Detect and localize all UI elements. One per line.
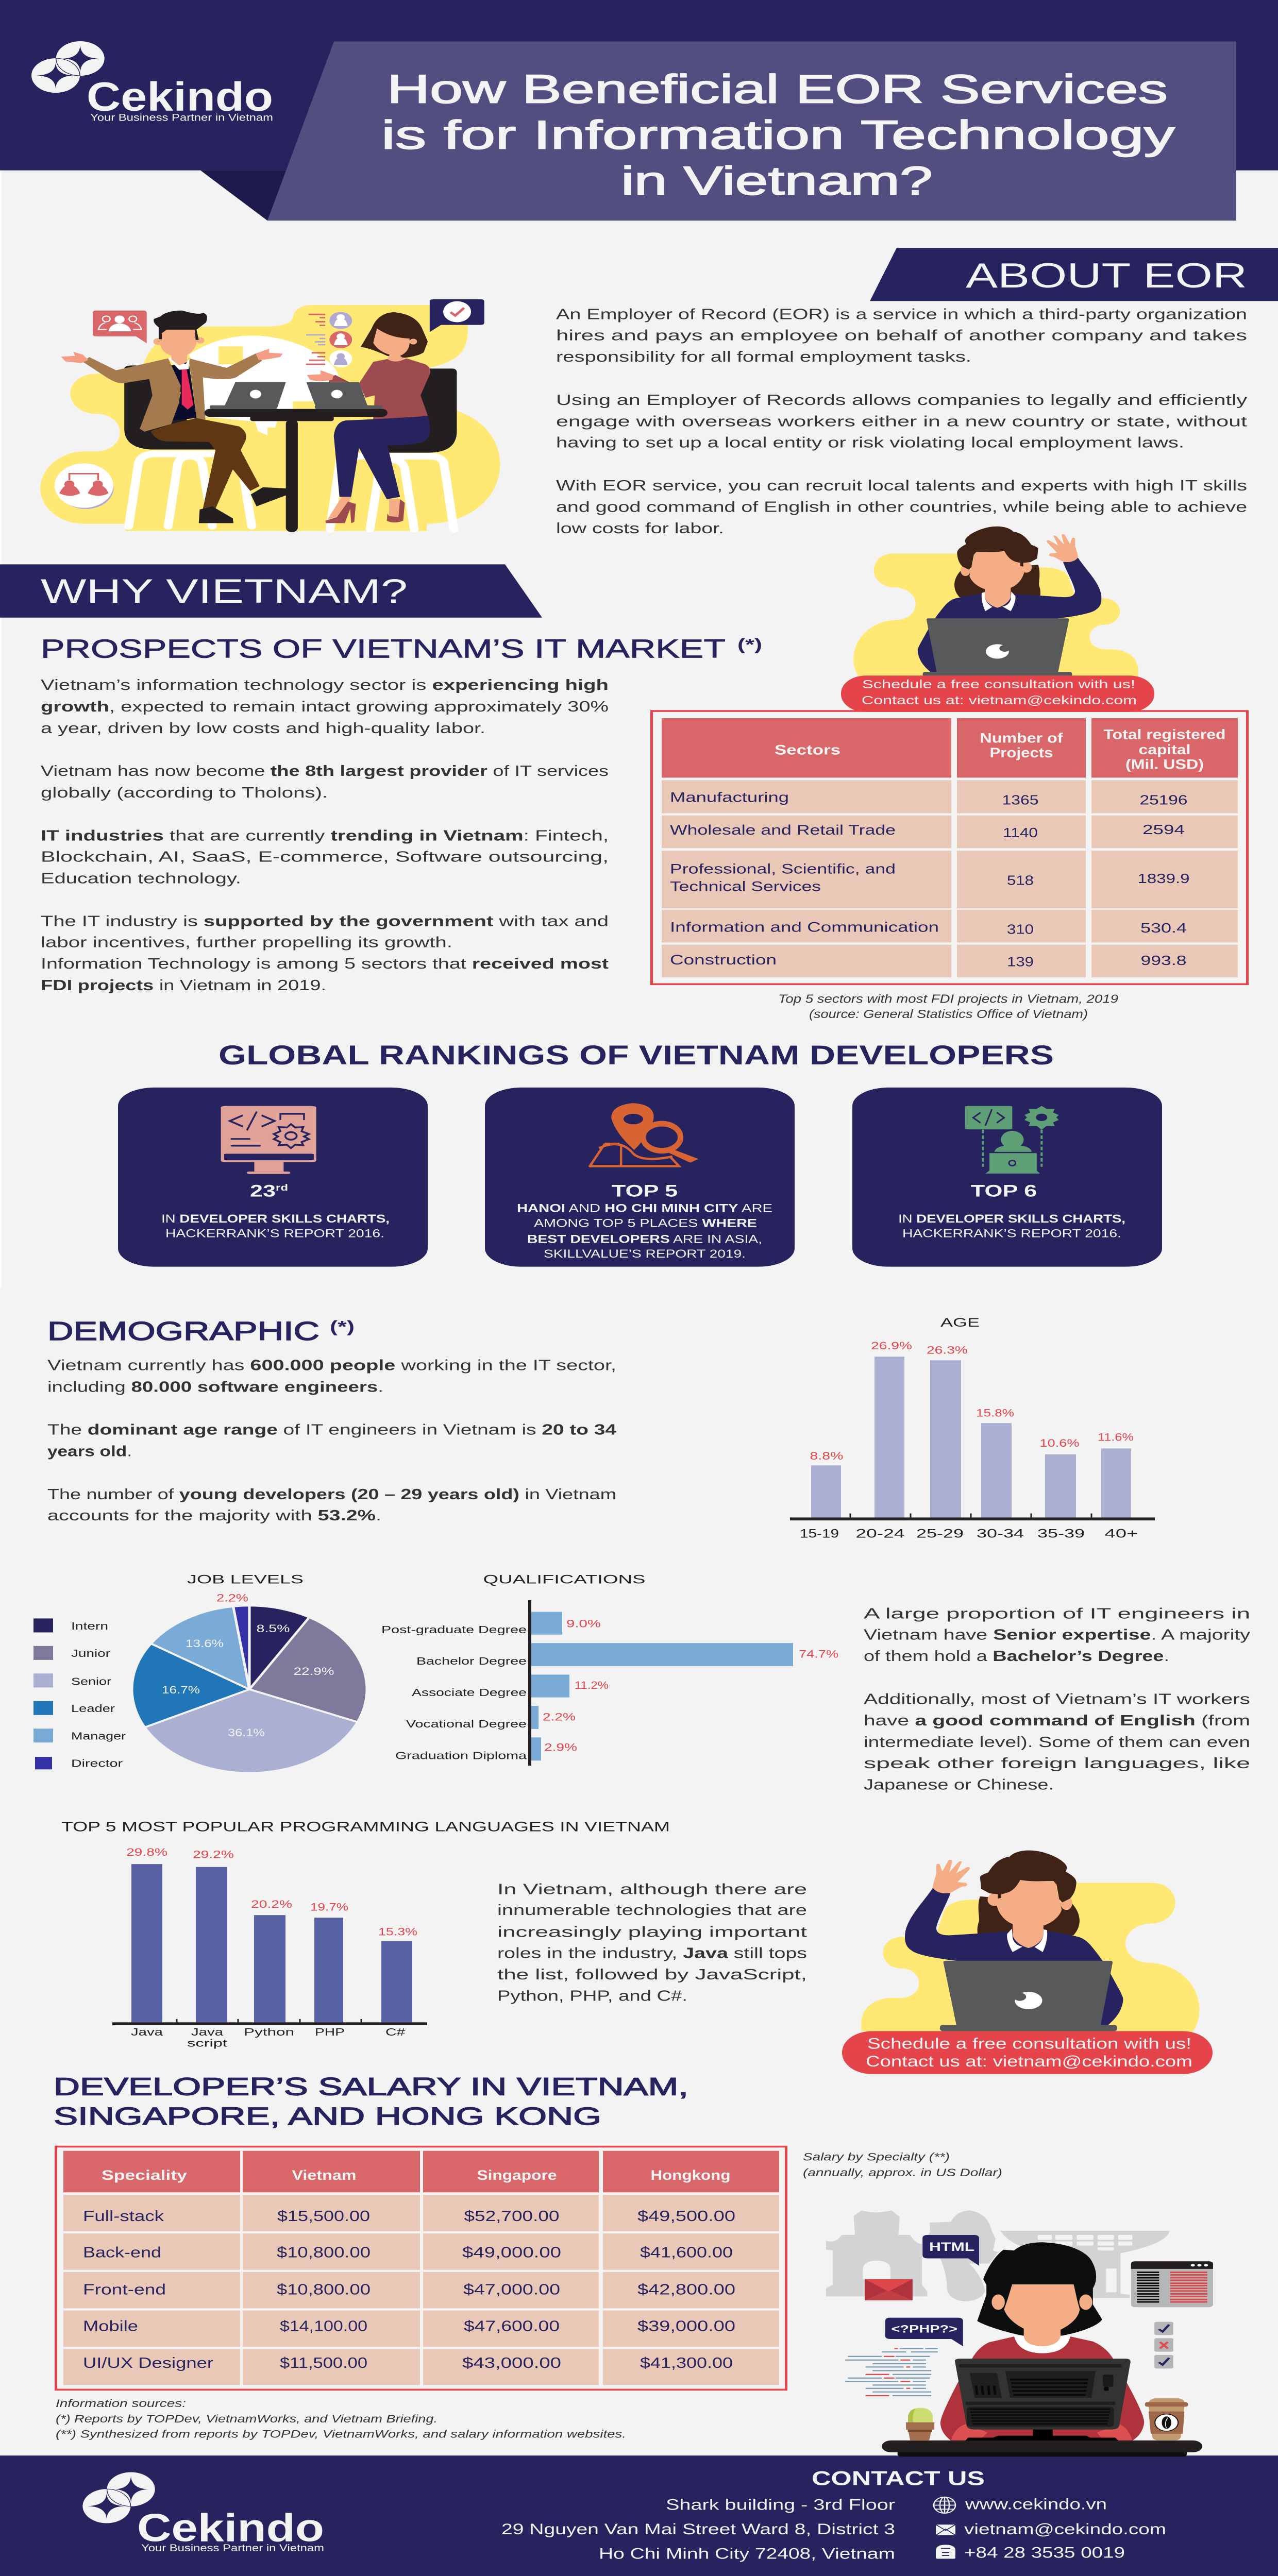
panel: ranking top 5: BEST DEVELOPERS ARE IN ASIA, (527, 1233, 762, 1245)
legend: job levels: Senior (71, 1676, 111, 1687)
table: top 5 FDI sectors: 993.8 (1141, 953, 1186, 968)
text block: about EOR: Using an Employer of Records allows companies to legally and efficiently (556, 392, 1248, 409)
table: salary by specialty: Mobile (83, 2318, 138, 2334)
text block: programming languages: increasingly playing important (497, 1924, 807, 1940)
text block: prospects: Vietnam has now become the 8th largest provider of IT services (41, 763, 609, 779)
text block: web, email, phone: vietnam@cekindo.com (964, 2520, 1166, 2537)
text block: web, email, phone: +84 28 3535 0019 (964, 2544, 1125, 2561)
text block: about EOR: having to set up a local entity or risk violating local employment laws. (556, 435, 1184, 451)
chart: age bar chart: 15-19 (800, 1527, 839, 1540)
chart: age bar chart: 26.9% (871, 1339, 912, 1352)
panel: ranking 23rd: HACKERRANK’S REPORT 2016. (165, 1227, 384, 1240)
panel: title background (267, 42, 1236, 221)
chart: qualifications bars: 2.9% (544, 1741, 577, 1754)
text block: address: 29 Nguyen Van Mai Street Ward 8, District 3 (501, 2520, 895, 2537)
button: consultation callout (top): Contact us at: vietnam@cekindo.com (862, 693, 1137, 707)
text block: expertise and English: have a good command of English (from (864, 1713, 1250, 1728)
icon: developer with code and gear (965, 1106, 1058, 1174)
text block: expertise and English: Vietnam have Senior expertise. A majority (864, 1627, 1251, 1643)
caption: table source: (source: General Statistics Office of Vietnam) (809, 1008, 1088, 1021)
chart: qualifications bars: Post-graduate Degree (381, 1624, 527, 1636)
icon: code monitor (221, 1106, 316, 1174)
title (381, 67, 1175, 204)
text block: about EOR (556, 307, 1248, 536)
text block: programming languages: roles in the industry, Java still tops (497, 1945, 807, 1961)
chart: programming languages bars: 29.2% (193, 1848, 234, 1861)
button: consultation callout (bottom): Contact us at: vietnam@cekindo.com (866, 2053, 1192, 2070)
icon: map pin and magnifier (589, 1103, 698, 1167)
text block: address: Ho Chi Minh City 72408, Vietnam (599, 2545, 895, 2562)
chart: qualifications bars: Graduation Diploma (395, 1750, 527, 1761)
legend: job levels: Intern (71, 1621, 108, 1632)
chart: programming languages bars: TOP 5 MOST POPULAR PROGRAMMING LANGUAGES IN VIETNAM (61, 1819, 670, 1834)
icon: mail (936, 2524, 955, 2535)
chart: qualifications bars: Associate Degree (412, 1687, 527, 1699)
chart: age bar chart: 35-39 (1037, 1527, 1085, 1540)
text block: about EOR: low costs for labor. (556, 520, 724, 536)
text block: expertise and English: Japanese or Chinese. (864, 1777, 1054, 1793)
heading: global rankings: GLOBAL RANKINGS OF VIETNAM DEVELOPERS (218, 1040, 1054, 1070)
caption: salary by specialty (803, 2150, 1002, 2179)
table: salary by specialty: $41,600.00 (640, 2245, 733, 2261)
chart: programming languages bars: 15.3% (378, 1925, 417, 1938)
table: salary by specialty: Front-end (83, 2282, 166, 2298)
caption: salary by specialty: (annually, approx. in US Dollar) (803, 2166, 1002, 2179)
text block: demographic (47, 1358, 617, 1524)
button: consultation callout (bottom) (842, 2031, 1213, 2074)
caption: table source (778, 992, 1118, 1021)
chart: job levels pie: 22.9% (293, 1665, 334, 1677)
panel: ranking top 6: HACKERRANK’S REPORT 2016. (902, 1227, 1121, 1240)
chart: programming languages bars: Java (191, 2027, 224, 2038)
text block: information sources: (**) Synthesized from reports by TOPDev, VietnamWorks, and salary information websites. (56, 2428, 626, 2440)
table: salary by specialty: Speciality (102, 2167, 188, 2183)
table: top 5 FDI sectors: Sectors (775, 742, 840, 757)
table: salary by specialty: Vietnam (292, 2167, 356, 2183)
header band (0, 0, 1278, 221)
panel: ranking 23rd (118, 1088, 428, 1267)
logo: Cekindo: Cekindo (87, 74, 273, 120)
text block: demographic: The dominant age range of IT engineers in Vietnam is 20 to 34 (47, 1422, 617, 1438)
illustration: developer at computer: HTML (929, 2240, 974, 2253)
table: salary by specialty: Back-end (83, 2245, 161, 2261)
text block: prospects: Blockchain, AI, SaaS, E-commerce, Software outsourcing, (41, 849, 609, 865)
panel: ranking top 6: TOP 6 (971, 1182, 1037, 1200)
chart: programming languages bars: Python (244, 2027, 294, 2038)
chart: age bar chart: 30-34 (977, 1527, 1024, 1540)
heading: demographic: DEMOGRAPHIC (47, 1316, 320, 1346)
chart: age bar chart: 8.8% (810, 1449, 843, 1462)
table: top 5 FDI sectors: (Mil. USD) (1125, 756, 1204, 772)
chart: age bar chart (790, 1315, 1155, 1540)
title: in Vietnam? (621, 159, 933, 204)
text block: demographic: including 80.000 software engineers. (47, 1379, 383, 1395)
table: salary by specialty: $11,500.00 (280, 2355, 367, 2371)
text block: expertise and English: of them hold a Bachelor’s Degree. (864, 1648, 1169, 1665)
table: salary by specialty: $42,800.00 (637, 2282, 735, 2298)
title: is for Information Technology (381, 113, 1175, 158)
chart: programming languages bars (61, 1819, 670, 2049)
table: top 5 FDI sectors: 25196 (1140, 792, 1187, 807)
chart: qualifications bars: 2.2% (543, 1710, 576, 1723)
text block: expertise and English (864, 1606, 1251, 1793)
chart: qualifications bars: QUALIFICATIONS (483, 1572, 645, 1586)
panel: ranking 23rd: IN DEVELOPER SKILLS CHARTS, (161, 1212, 390, 1225)
table: salary by specialty: $39,000.00 (637, 2318, 735, 2334)
table: salary by specialty: $15,500.00 (277, 2208, 370, 2224)
text block: information sources: Information sources: (56, 2397, 186, 2410)
text block: information sources (56, 2397, 626, 2440)
icon: globe (934, 2497, 955, 2513)
heading: demographic: (*) (330, 1318, 355, 1336)
chart: qualifications bars: 9.0% (566, 1617, 601, 1630)
text block: prospects: a year, driven by low costs and high-quality labor. (41, 721, 485, 737)
text block: address (501, 2496, 895, 2562)
text block: programming languages: In Vietnam, although there are (497, 1882, 807, 1897)
text block: about EOR: and good command of English in other countries, while being able to achieve (556, 499, 1247, 515)
text block: information sources: (*) Reports by TOPDev, VietnamWorks, and Vietnam Briefing. (56, 2412, 438, 2425)
chart: job levels pie: 8.5% (256, 1622, 290, 1635)
text block: prospects: IT industries that are currently trending in Vietnam: Fintech, (41, 828, 609, 844)
heading: contact us: CONTACT US (812, 2467, 985, 2489)
title: How Beneficial EOR Services (387, 67, 1168, 112)
footer band (0, 2455, 1278, 2576)
table: salary by specialty: $10,800.00 (277, 2282, 371, 2298)
button: consultation callout (bottom): Schedule a free consultation with us! (867, 2035, 1191, 2052)
chart: qualifications bars: Bachelor Degree (416, 1655, 527, 1667)
caption: table source: Top 5 sectors with most FDI projects in Vietnam, 2019 (778, 992, 1118, 1005)
legend: job levels (33, 1618, 126, 1769)
chart: qualifications bars: 11.2% (575, 1679, 609, 1691)
heading: developer's salary: DEVELOPER’S SALARY IN VIETNAM, (54, 2073, 688, 2100)
chart: programming languages bars: 20.2% (251, 1897, 292, 1910)
text block: demographic: accounts for the majority with 53.2%. (47, 1507, 381, 1524)
chart: programming languages bars: C# (385, 2027, 406, 2038)
panel: ranking top 5 (485, 1088, 795, 1267)
table: top 5 FDI sectors: Technical Services (670, 879, 821, 894)
table: salary by specialty: $43,000.00 (462, 2355, 561, 2371)
chart: job levels pie: 16.7% (162, 1683, 200, 1696)
text block: programming languages: the list, followed by JavaScript, (497, 1967, 807, 1982)
illustration: waving woman with laptop (top) (853, 527, 1138, 679)
chart: programming languages bars: PHP (315, 2027, 345, 2038)
text block: about EOR: With EOR service, you can recruit local talents and experts with high IT skills (556, 478, 1247, 494)
table: top 5 FDI sectors: Wholesale and Retail Trade (670, 822, 896, 838)
chart: qualifications bars: 74.7% (799, 1648, 838, 1660)
text block: demographic: The number of young developers (20 – 29 years old) in Vietnam (47, 1486, 616, 1502)
table: top 5 FDI sectors: Construction (670, 952, 777, 968)
legend: job levels: Manager (71, 1731, 126, 1742)
text block: prospects: The IT industry is supported by the government with tax and (41, 913, 609, 929)
text block: programming languages (497, 1882, 807, 2004)
table: top 5 FDI sectors: 1365 (1002, 792, 1039, 807)
table: top 5 FDI sectors: 530.4 (1140, 921, 1187, 936)
chart: age bar chart: 10.6% (1040, 1436, 1080, 1449)
table: top 5 FDI sectors: 1140 (1003, 825, 1038, 840)
text block: web, email, phone (964, 2496, 1166, 2561)
chart: age bar chart: 20-24 (855, 1527, 904, 1540)
panel: ranking top 5: AMONG TOP 5 PLACES WHERE (534, 1217, 757, 1230)
text block: prospects: FDI projects in Vietnam in 2019. (41, 977, 326, 994)
table: salary by specialty: $47,600.00 (464, 2318, 560, 2334)
chart: programming languages bars: 19.7% (310, 1901, 348, 1913)
table: top 5 FDI sectors: Projects (989, 745, 1053, 760)
panel: ranking top 6 (852, 1088, 1162, 1267)
table: top 5 FDI sectors (651, 711, 1247, 984)
text block: prospects: labor incentives, further propelling its growth. (41, 935, 452, 951)
panel: ranking top 6: IN DEVELOPER SKILLS CHARTS, (898, 1212, 1125, 1225)
chart: age bar chart: AGE (940, 1315, 980, 1330)
button: consultation callout (top): Schedule a free consultation with us! (862, 678, 1135, 691)
text block: demographic: Vietnam currently has 600.000 people working in the IT sector, (47, 1358, 616, 1374)
heading: developer's salary: SINGAPORE, AND HONG KONG (54, 2103, 601, 2130)
illustration: two people meeting at a table (40, 299, 500, 532)
text block: prospects: growth, expected to remain intact growing approximately 30% (41, 699, 609, 715)
table: salary by specialty: $41,300.00 (640, 2355, 733, 2371)
table: salary by specialty: Full-stack (83, 2208, 164, 2224)
text block: address: Shark building - 3rd Floor (666, 2496, 895, 2513)
table: top 5 FDI sectors: 2594 (1142, 822, 1185, 837)
heading: why Vietnam: WHY VIETNAM? (41, 572, 408, 610)
text block: about EOR: engage with overseas workers either in a new country or state, without (556, 414, 1247, 430)
heading: about EOR (870, 248, 1278, 301)
text block: prospects: Information Technology is among 5 sectors that received most (41, 956, 609, 972)
legend: job levels: Director (71, 1758, 123, 1769)
table: top 5 FDI sectors: Total registered (1104, 726, 1225, 742)
text block: expertise and English: speak other foreign languages, like (864, 1756, 1250, 1772)
text block: prospects: globally (according to Tholons). (41, 785, 328, 801)
table: top 5 FDI sectors: 139 (1007, 955, 1034, 969)
chart: age bar chart: 11.6% (1098, 1431, 1134, 1443)
heading: prospects of IT market: (*) (737, 635, 762, 654)
panel: ranking top 5: SKILLVALUE’S REPORT 2019. (544, 1247, 746, 1260)
chart: qualifications bars (381, 1572, 838, 1766)
text block: about EOR: An Employer of Record (EOR) is a service in which a third-party organization (556, 307, 1247, 323)
chart: qualifications bars: Vocational Degree (406, 1718, 527, 1730)
chart: job levels pie (33, 1572, 367, 1773)
illustration: developer at computer: <?PHP?> (891, 2323, 957, 2335)
text block: expertise and English: intermediate level). Some of them can even (864, 1734, 1250, 1750)
chart: age bar chart: 25-29 (916, 1527, 964, 1540)
text block: expertise and English: Additionally, most of Vietnam’s IT workers (864, 1691, 1250, 1707)
chart: job levels pie: 13.6% (186, 1637, 224, 1650)
text block: programming languages: Python, PHP, and C#. (497, 1988, 687, 2004)
table: salary by specialty: $14,100.00 (280, 2318, 367, 2334)
table: top 5 FDI sectors: 1839.9 (1138, 871, 1189, 886)
table: salary by specialty: $47,000.00 (463, 2282, 560, 2298)
panel: ranking top 5: HANOI AND HO CHI MINH CITY ARE (517, 1202, 772, 1214)
table: salary by specialty: $52,700.00 (464, 2208, 559, 2224)
button: consultation callout (top) (841, 675, 1154, 712)
chart: programming languages bars: 29.8% (126, 1845, 167, 1858)
footer logo: Cekindo (82, 2472, 324, 2553)
table: top 5 FDI sectors: capital (1139, 741, 1190, 757)
text block: about EOR: responsibility for all formal employment tasks. (556, 349, 971, 365)
heading: developer's salary (54, 2073, 688, 2130)
logo: Cekindo (31, 41, 273, 123)
table: salary by specialty: $49,500.00 (637, 2208, 735, 2224)
chart: job levels pie: 36.1% (228, 1726, 265, 1739)
text block: web, email, phone: www.cekindo.vn (965, 2496, 1107, 2513)
chart: programming languages bars: script (187, 2038, 227, 2049)
text block: about EOR: hires and pays an employee on behalf of another company and takes (556, 328, 1247, 344)
table: top 5 FDI sectors: Manufacturing (670, 790, 789, 805)
table: top 5 FDI sectors: 310 (1007, 922, 1034, 937)
illustration: waving woman with laptop (bottom) (861, 1851, 1199, 2033)
legend: job levels: Leader (71, 1703, 115, 1715)
table: top 5 FDI sectors: Professional, Scientific, and (670, 861, 896, 876)
footer logo: Cekindo: Cekindo (137, 2505, 324, 2550)
text block: prospects: Education technology. (41, 871, 241, 887)
heading: about EOR: ABOUT EOR (966, 256, 1247, 295)
text block: expertise and English: A large proportion of IT engineers in (864, 1606, 1250, 1622)
legend: job levels: Junior (71, 1648, 110, 1659)
illustration: developer at computer (826, 2210, 1213, 2456)
text block: programming languages: innumerable technologies that are (497, 1903, 807, 1919)
panel: ranking 23rd: rd (276, 1183, 288, 1193)
icon: phone (936, 2545, 955, 2559)
table: salary by specialty: $49,000.00 (462, 2245, 561, 2261)
table: top 5 FDI sectors: 518 (1007, 873, 1034, 888)
table: salary by specialty: $10,800.00 (277, 2245, 371, 2261)
panel: ranking top 5: TOP 5 (612, 1182, 678, 1200)
panel: ranking 23rd: 23 (250, 1182, 276, 1200)
chart: age bar chart: 40+ (1105, 1527, 1138, 1540)
table: salary by specialty (56, 2147, 786, 2389)
table: salary by specialty: Hongkong (650, 2167, 731, 2183)
text block: demographic: years old. (47, 1444, 132, 1460)
chart: age bar chart: 15.8% (976, 1406, 1014, 1419)
table: top 5 FDI sectors: Information and Communication (670, 920, 939, 935)
chart: job levels pie: 2.2% (216, 1591, 248, 1604)
chart: programming languages bars: Java (131, 2027, 163, 2038)
heading: why Vietnam (0, 564, 542, 618)
footer logo: Cekindo: Your Business Partner in Vietnam (141, 2543, 324, 2553)
table: salary by specialty: UI/UX Designer (83, 2355, 213, 2371)
heading: prospects of IT market: PROSPECTS OF VIETNAM’S IT MARKET (41, 634, 726, 664)
caption: salary by specialty: Salary by Specialty (**) (803, 2150, 950, 2163)
text block: prospects: Vietnam’s information technology sector is experiencing high (41, 677, 609, 693)
chart: job levels pie: JOB LEVELS (187, 1572, 304, 1586)
chart: age bar chart: 26.3% (927, 1344, 968, 1356)
table: top 5 FDI sectors: Number of (980, 730, 1063, 745)
table: salary by specialty: Singapore (477, 2167, 557, 2183)
text block: prospects (41, 677, 609, 994)
logo: Cekindo: Your Business Partner in Vietnam (90, 112, 273, 123)
